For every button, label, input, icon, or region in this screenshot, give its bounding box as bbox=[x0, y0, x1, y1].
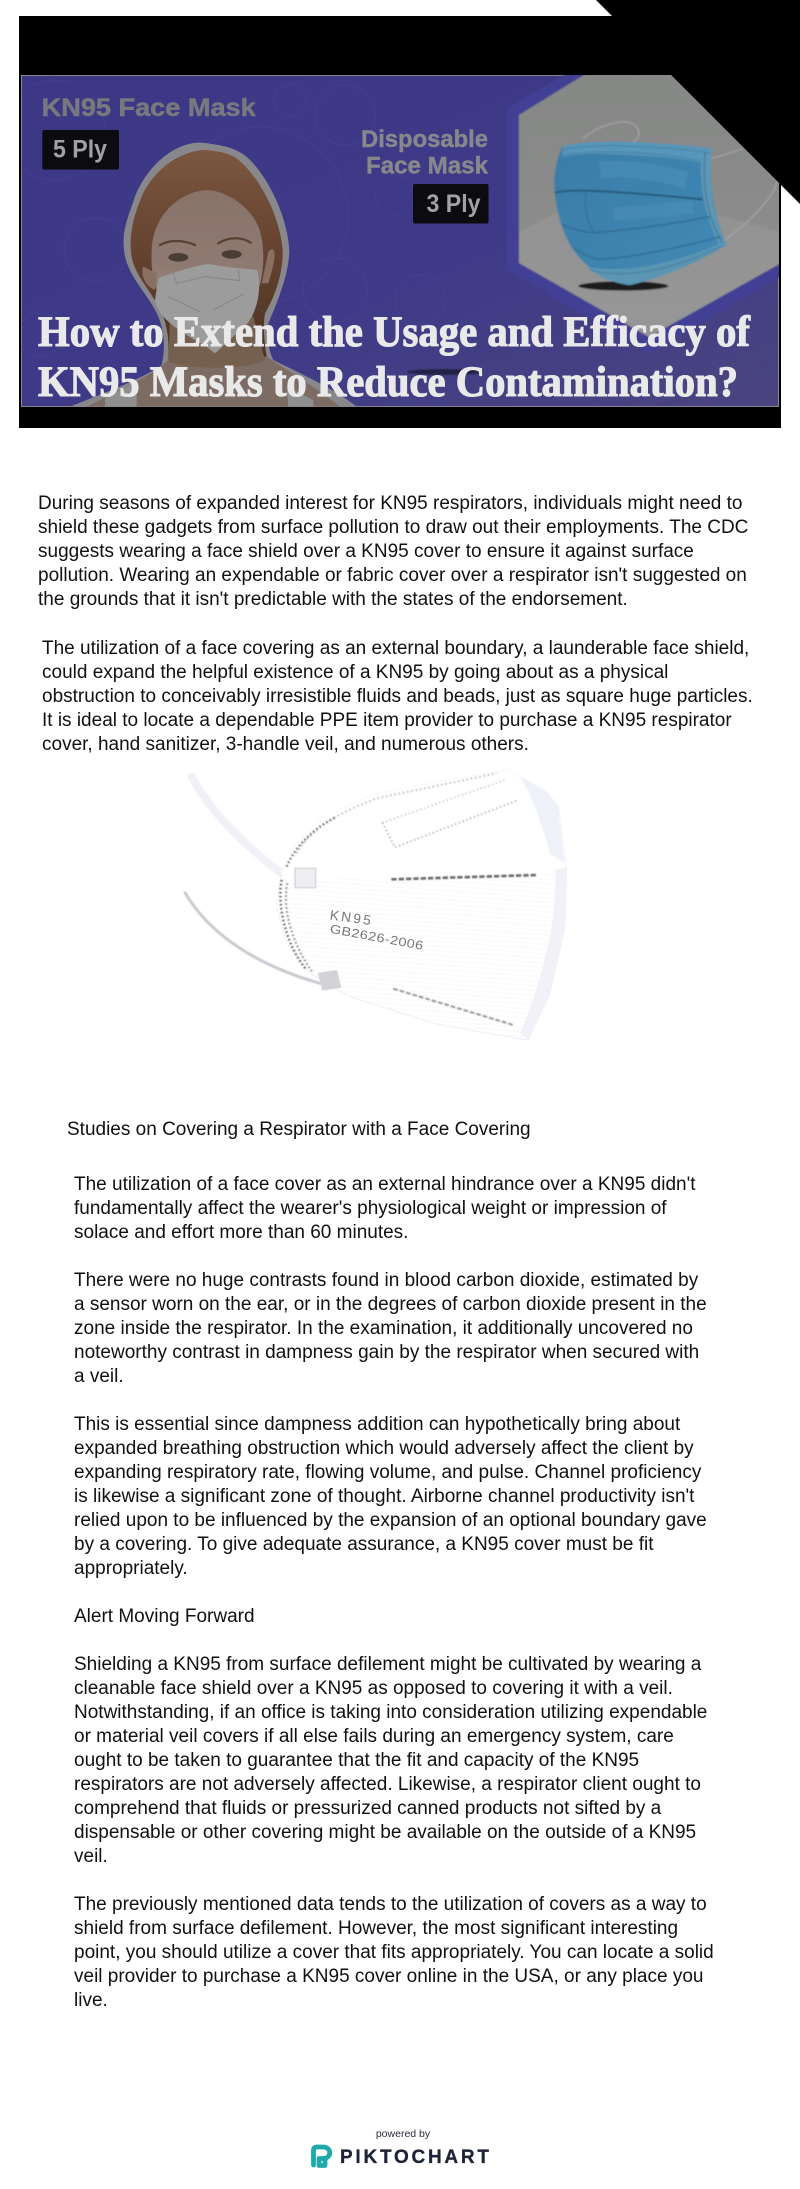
body paragraph 3: This is essential since dampness addition can hypothetically bring about expanded breathing obstruction which would adversely affect the client by expanding respiratory rate, flowing volume, and pulse. Channel proficiency is likewise a significant zone of thought. Airborne channel productivity isn't relied upon to be influenced by the expansion of an optional boundary gave by a covering. To give adequate assurance, a KN95 cover must be fit appropriately. bbox=[74, 1414, 707, 1578]
body paragraph 2: There were no huge contrasts found in blood carbon dioxide, estimated by a sensor worn on the ear, or in the degrees of carbon dioxide present in the zone inside the respirator. In the examination, it additionally uncovered no noteworthy contrast in dampness gain by the respirator when secured with a veil. bbox=[74, 1270, 707, 1386]
footer: powered by Piktochart bbox=[311, 2128, 489, 2168]
intro paragraph 2: The utilization of a face covering as an external boundary, a launderable face shield, could expand the helpful existence of a KN95 by going about as a physical obstruction to conceivably irresistible fluids and beads, just as square huge particles. It is ideal to locate a dependable PPE item provider to purchase a KN95 respirator cover, hand sanitizer, 3-handle veil, and numerous others. bbox=[42, 638, 753, 754]
label: Disposable Face Mask bbox=[362, 129, 488, 174]
black corner bbox=[596, 0, 800, 204]
strap welds bbox=[295, 868, 341, 990]
label: Disposable Face Mask: Disposable bbox=[361, 126, 488, 153]
title: KN95 Masks to Reduce Contamination? bbox=[38, 359, 738, 406]
icon: Piktochart logo bbox=[314, 2147, 330, 2166]
body paragraph 4: Shielding a KN95 from surface defilement might be cultivated by wearing a cleanable face shield over a KN95 as opposed to covering it with a veil. Notwithstanding, if an office is taking into consideration utilizing expendable or material veil covers if all else fails during an emergency system, care ought to be taken to guarantee that the fit and capacity of the KN95 respirators are not adversely affected. Likewise, a respirator client ought to comprehend that fluids or pressurized canned products not sifted by a dispensable or other covering might be available on the outside of a KN95 veil. bbox=[74, 1654, 707, 1866]
badge: 5 Ply bbox=[42, 130, 119, 170]
label: KN95 Face Mask: KN95 Face Mask bbox=[42, 94, 256, 122]
upper fold bbox=[282, 770, 567, 880]
printed mark: GB2626-2006 bbox=[329, 922, 425, 953]
intro paragraph 1: During seasons of expanded interest for KN95 respirators, individuals might need to shield these gadgets from surface pollution to draw out their employments. The CDC suggests wearing a face shield over a KN95 cover to ensure it against surface pollution. Wearing an expendable or fabric cover over a respirator isn't suggested on the grounds that it isn't predictable with the states of the endorsement. bbox=[38, 492, 748, 610]
wordmark: PIKTOCHART bbox=[340, 2147, 489, 2168]
label: Disposable Face Mask: Face Mask bbox=[366, 152, 489, 180]
body paragraph 5: The previously mentioned data tends to the utilization of covers as a way to shield from surface defilement. However, the most significant interesting point, you should utilize a cover that fits appropriately. You can locate a solid veil provider to purchase a KN95 cover online in the USA, or any place you live. bbox=[74, 1894, 714, 2010]
banner photo bbox=[5, 62, 790, 407]
badge: 3 Ply bbox=[413, 184, 488, 224]
mask body bbox=[277, 770, 567, 1040]
ear loops bbox=[185, 777, 320, 983]
woman wearing KN95 mask bbox=[70, 143, 357, 407]
printed mark: KN95 bbox=[329, 907, 374, 928]
section heading: Studies on Covering a Respirator with a Face Covering bbox=[67, 1118, 531, 1140]
title bbox=[38, 309, 751, 406]
body paragraph 1: The utilization of a face cover as an external hindrance over a KN95 didn't fundamentally affect the wearer's physiological weight or impression of solace and effort more than 60 minutes. bbox=[74, 1174, 696, 1242]
black frame bbox=[19, 16, 781, 428]
powered by: powered by bbox=[376, 2128, 431, 2140]
badge: 5 Ply: 5 Ply bbox=[53, 136, 107, 164]
image: KN95 respirator bbox=[183, 770, 567, 1040]
hero banner bbox=[19, 0, 800, 428]
hexagon with disposable mask bbox=[507, 62, 790, 353]
shadow on floor bbox=[407, 369, 483, 375]
badge: 3 Ply: 3 Ply bbox=[426, 190, 481, 218]
disposable face mask bbox=[554, 122, 777, 291]
subheading: Alert Moving Forward: Alert Moving Forward bbox=[74, 1606, 255, 1626]
printed mark bbox=[329, 907, 425, 953]
title: How to Extend the Usage and Efficacy of bbox=[38, 309, 751, 356]
background bubbles bbox=[5, 80, 445, 357]
stitching bbox=[280, 773, 537, 1025]
